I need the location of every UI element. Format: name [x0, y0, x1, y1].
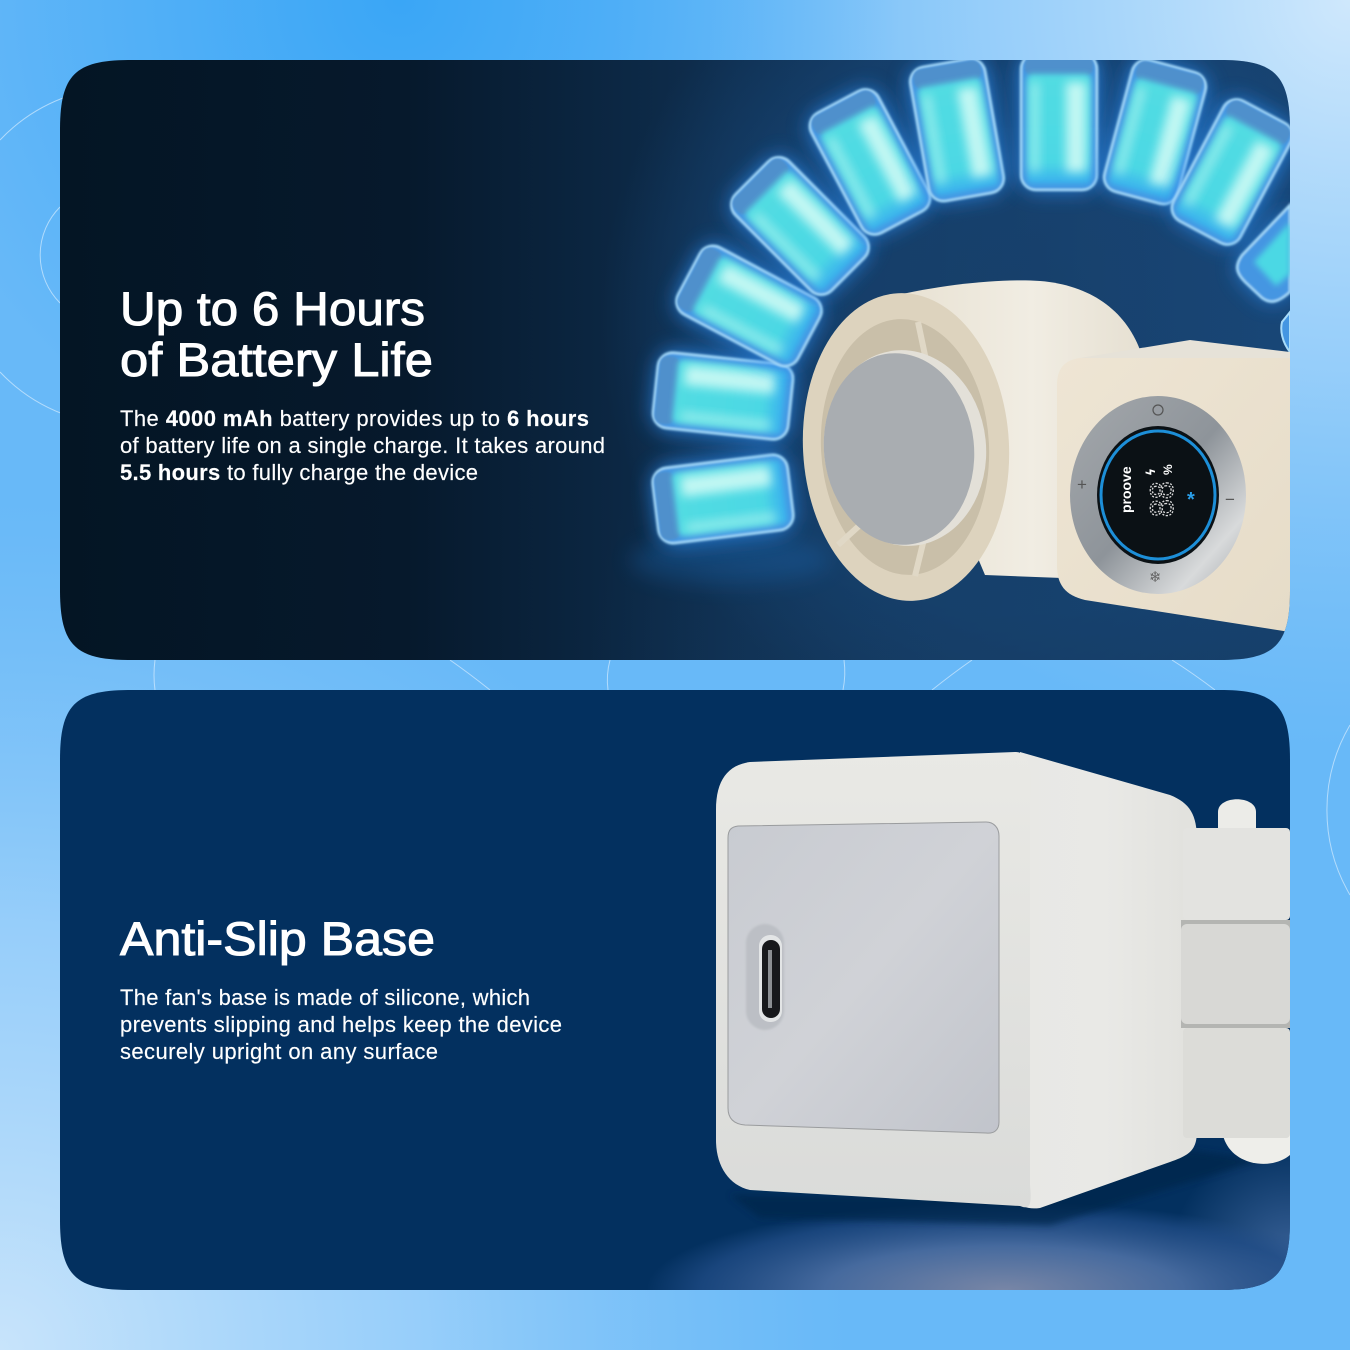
- dial with display: [1070, 396, 1246, 594]
- dial with display: %: [1161, 464, 1175, 475]
- panel background: [60, 60, 1290, 660]
- body text: battery: [120, 406, 605, 485]
- panel background: [60, 690, 1290, 1290]
- heading: battery: [120, 282, 433, 386]
- hinge: [1181, 828, 1290, 1138]
- heading: battery: of Battery Life: [120, 333, 433, 386]
- rubber plate with USB-C port: [728, 822, 999, 1133]
- heading: anti-slip: Anti-Slip Base: [120, 912, 435, 965]
- panel: battery life: [60, 54, 1299, 660]
- body text: anti-slip: The fan's base is made of silicone, which: [120, 985, 530, 1010]
- dial with display: ❄: [1149, 568, 1162, 586]
- dial with display: ϟ: [1144, 468, 1158, 476]
- dial with display: proove: [1118, 466, 1134, 513]
- dial with display: *: [1187, 489, 1195, 511]
- heading: battery: Up to 6 Hours: [120, 282, 425, 335]
- body text: battery: of battery life on a single charge. It takes around: [120, 433, 605, 458]
- device body: [716, 752, 1197, 1208]
- cable: [1218, 799, 1290, 1164]
- body text: anti-slip: prevents slipping and helps keep the device: [120, 1012, 562, 1037]
- glowing battery cells arc: [651, 54, 1299, 547]
- dial with display: −: [1225, 490, 1235, 509]
- panel: anti-slip base: [60, 690, 1290, 1290]
- body text: battery: The 4000 mAh battery provides up to 6 hours: [120, 406, 589, 431]
- body text: anti-slip: securely upright on any surface: [120, 1039, 438, 1064]
- body text: anti-slip: [120, 985, 562, 1064]
- controller box: [1057, 340, 1290, 632]
- body text: battery: 5.5 hours to fully charge the device: [120, 460, 478, 485]
- dial with display: 88: [1144, 481, 1180, 517]
- fan head: [795, 280, 1140, 606]
- dial with display: +: [1077, 475, 1087, 494]
